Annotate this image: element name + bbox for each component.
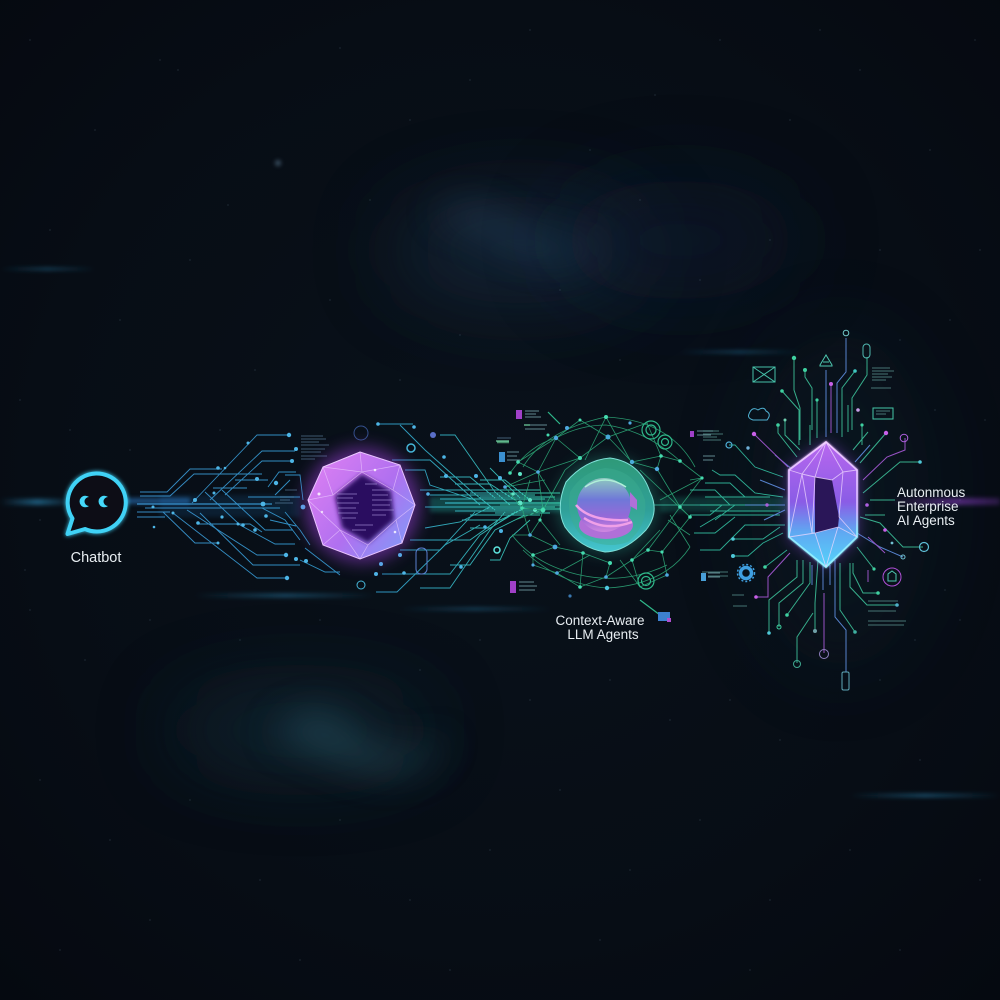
circuit traces: chatbot to octagon to sphere	[137, 424, 560, 592]
octagonal gem	[304, 447, 420, 563]
icon: lower left node	[794, 660, 800, 668]
faint star glow	[275, 160, 281, 166]
icon: envelope	[753, 367, 775, 382]
data snippets: around sphere	[496, 410, 720, 622]
data snippets: beside octagon	[275, 436, 511, 503]
circuit traces: crystal radial blue and violet	[745, 338, 905, 672]
label: Context-Aware LLM Agents: LLM Agents	[567, 627, 639, 642]
crystal dark inner facet	[815, 477, 839, 533]
neural network around sphere	[500, 417, 720, 588]
octagon data text lines	[337, 484, 394, 530]
icon: lower right ring	[920, 542, 928, 552]
network nodes	[503, 415, 704, 598]
icon: bottom capsule	[842, 672, 849, 690]
label: Chatbot: Chatbot	[71, 550, 121, 566]
icon: top ring	[843, 330, 849, 336]
circuit traces: crystal radial green	[769, 357, 923, 663]
system icons around crystal	[738, 330, 928, 690]
sphere core	[557, 457, 657, 553]
icon: chatbot speech bubble	[68, 473, 126, 534]
label: Autonomous Enterprise AI Agents: Autonmous	[897, 485, 966, 500]
data snippets: around crystal	[702, 368, 906, 625]
icon: lower shield	[820, 650, 828, 658]
circuit nodes: left section	[152, 422, 537, 580]
circuit traces: teal, crystal left	[690, 445, 787, 567]
icon: home node	[820, 355, 832, 366]
icon: violet badge	[883, 568, 901, 586]
crystal circuit nodes	[726, 356, 922, 635]
light streaks	[0, 268, 1000, 797]
prism crystal	[789, 442, 857, 567]
octagon facet lines	[308, 452, 415, 559]
label: Autonomous Enterprise AI Agents: AI Agents	[897, 513, 955, 528]
icon: cloud	[748, 408, 769, 420]
label: Autonomous Enterprise AI Agents: Enterprise	[897, 499, 959, 514]
ring icons: network	[548, 412, 672, 615]
icon: top capsule	[863, 344, 870, 358]
octagon dark core	[335, 474, 394, 543]
icon: small circuit glyphs around octagon	[354, 426, 500, 589]
icon: browser panel	[873, 408, 893, 419]
label: Context-Aware LLM Agents: Context-Aware	[555, 613, 645, 628]
icon: violet ring	[900, 434, 908, 442]
crystal facet lines	[789, 442, 857, 567]
icon: gear	[740, 568, 752, 578]
sphere inner orb	[579, 511, 633, 539]
nebula clouds	[170, 180, 930, 773]
